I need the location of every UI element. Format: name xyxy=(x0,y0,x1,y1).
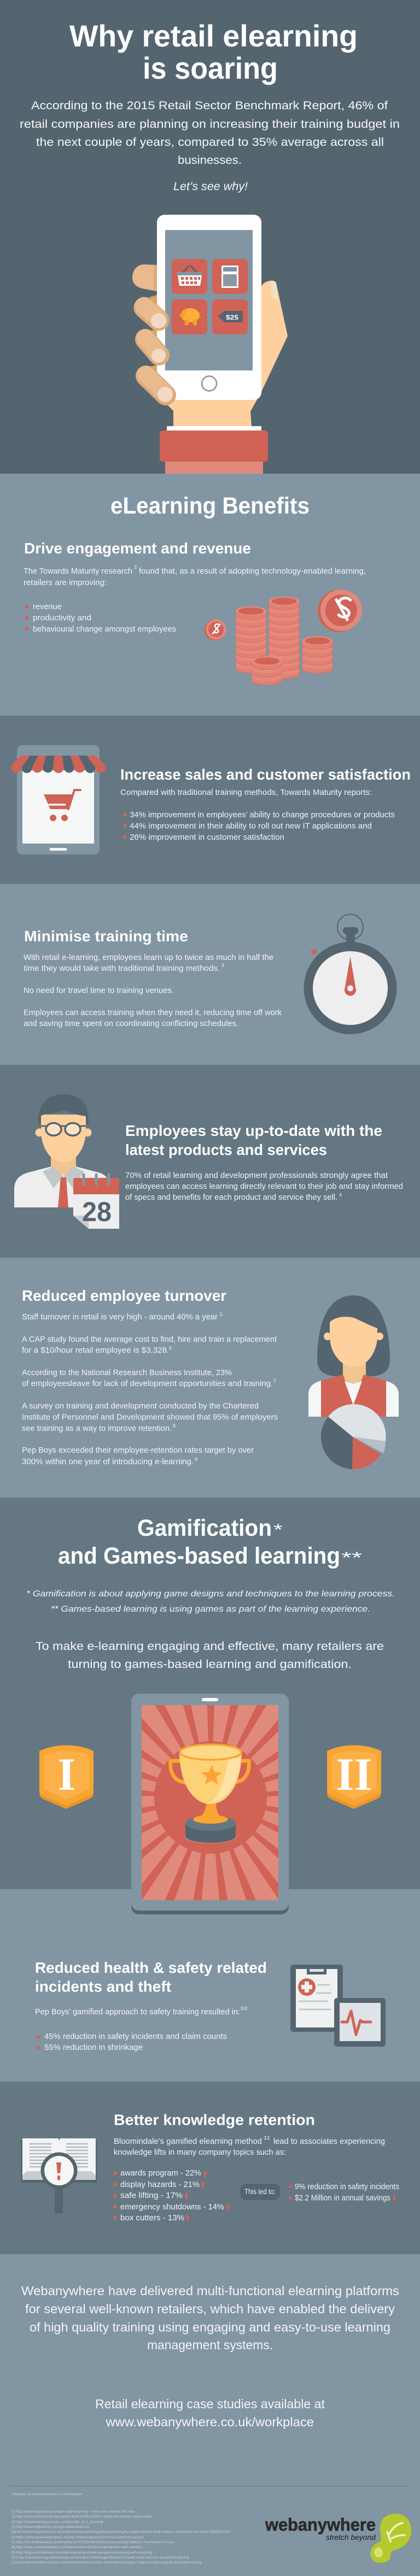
phone xyxy=(157,215,261,400)
bullet list: 45% reduction in safety incidents and claim counts xyxy=(44,2032,227,2041)
bullet list: results: 9% reduction in safety incidents xyxy=(295,2183,399,2191)
body text: lead to associates experiencing xyxy=(273,2137,385,2146)
bullet list: behavioural change amongst employees xyxy=(33,624,176,634)
heading: incidents and theft xyxy=(35,1978,171,1995)
heading xyxy=(35,1959,267,1995)
tagline: Let’s see why! xyxy=(173,180,248,193)
bullet list xyxy=(25,602,176,634)
closing text xyxy=(21,2284,399,2352)
app: piggy bank xyxy=(172,299,207,334)
body text: 4 xyxy=(339,1192,342,1198)
bullet list: revenue xyxy=(33,602,62,611)
body text: of employeesleave for lack of development opportunities and training. xyxy=(22,1380,273,1388)
bullet list: 55% reduction in shrinkage xyxy=(44,2043,143,2052)
calendar number: 28 xyxy=(82,1196,112,1227)
body text: Pep Boys’ gamified approach to safety training resulted in: xyxy=(35,2007,240,2017)
bullet list: 26% improvement in customer satisfaction xyxy=(130,833,284,842)
bullet list: topics: box cutters - 13% xyxy=(120,2213,184,2223)
body text: 2 xyxy=(134,564,137,570)
intro text: According to the 2015 Retail Sector Benchmark Report, 46% of xyxy=(31,99,388,112)
heading: Drive engagement and revenue xyxy=(24,540,251,557)
body text xyxy=(24,953,282,1028)
body text: Bloomindale’s gamified elearning method xyxy=(114,2137,262,2146)
body text: time they would take with traditional training methods. xyxy=(24,964,220,973)
app: basket xyxy=(172,259,207,294)
sleeve xyxy=(160,426,268,474)
heading: Employees stay up-to-date with the xyxy=(125,1122,382,1139)
body text: Employees can access training when they need it, reducing time off work xyxy=(24,1009,282,1017)
call to action text: Retail elearning case studies available at xyxy=(95,2397,325,2411)
icon: man with calendar xyxy=(14,1094,119,1229)
intro text: retail companies are planning on increasing their training budget in xyxy=(20,118,400,131)
body text: A survey on training and development conducted by the Chartered xyxy=(22,1402,259,1411)
body text: 6 xyxy=(169,1345,172,1351)
body text: With retail e-learning, employees learn up to twice as much in half the xyxy=(24,953,273,962)
body text: 7 xyxy=(273,1378,276,1384)
heading: Minimise training time xyxy=(24,928,188,945)
body text: knowledge lifts in many company topics such as: xyxy=(114,2148,286,2157)
heading: eLearning Benefits: eLearning Benefits xyxy=(110,493,310,519)
logo: webanywhere: webanywhere xyxy=(265,2515,376,2534)
intro text: businesses. xyxy=(178,154,242,167)
body text: Institute of Personnel and Development showed that 95% of employers xyxy=(22,1413,278,1422)
body text: No need for travel time to training venues. xyxy=(24,987,174,995)
references xyxy=(11,2510,231,2565)
body text: for a $10/hour retail employee is $3,328. xyxy=(22,1346,169,1355)
body text: Pep Boys exceeded their employee-retention rates target by over xyxy=(22,1446,254,1455)
references: [9] http://blog.commlabindia.com/elearning-design/retail-management-training-with-elearning xyxy=(11,2551,152,2555)
definitions text xyxy=(26,1589,395,1614)
icon: book and magnifier xyxy=(21,2138,97,2213)
body text: 8 xyxy=(173,1423,176,1429)
bullet list: topics: safe lifting - 17% xyxy=(120,2191,183,2200)
callout: this led to: This led to: xyxy=(244,2188,276,2196)
panel: drive engagement and revenue xyxy=(24,540,366,685)
credit: Infographic by www.webanywhere.co.uk/workplace xyxy=(11,2492,82,2496)
body text: 3 xyxy=(221,963,224,968)
bullet list: topics: display hazards - 21% xyxy=(120,2180,200,2189)
intro text: To make e-learning engaging and effective, many retailers are xyxy=(36,1640,384,1653)
references: [2] http://www.towardsmaturity.org/article/2015/06/11/2015-sector-benchmark-report-retail/ xyxy=(11,2515,151,2519)
badge: I: I xyxy=(57,1749,75,1800)
body text: 11 xyxy=(264,2135,270,2141)
closing text: management systems. xyxy=(147,2338,273,2352)
closing text: Webanywhere have delivered multi-functional elearning platforms xyxy=(21,2284,399,2298)
title xyxy=(69,19,358,85)
intro text: the next couple of years, compared to 35% average across all xyxy=(36,136,384,149)
app: calculator xyxy=(212,259,248,294)
icon: coins xyxy=(205,590,362,685)
bullet list: results xyxy=(289,2183,399,2203)
icon: tablet with trophy xyxy=(131,1694,289,1914)
body text: A CAP study found the average cost to find, hire and train a replacement xyxy=(22,1335,277,1344)
app: price tag xyxy=(212,299,248,334)
title: is soaring xyxy=(143,51,278,85)
logo: webanywhere xyxy=(265,2514,411,2563)
references: [3] http://retailertrainingservices.com/benefits_of_e_learning/ xyxy=(11,2520,103,2524)
icon: clipboard and heart monitor xyxy=(290,1965,386,2047)
body text: found that, as a result of adopting technology-enabled learning, xyxy=(139,567,366,576)
palm and thumb xyxy=(164,281,288,426)
panel: reduced employee turnover xyxy=(22,1287,399,1469)
bullet list: topics xyxy=(113,2168,230,2223)
bullet list xyxy=(36,2032,227,2052)
trophy xyxy=(171,1744,249,1843)
panel: reduced health and safety incidents xyxy=(35,1959,386,2052)
body text: 9 xyxy=(195,1457,197,1462)
body text: 300% within one year of introducing e-learning. xyxy=(22,1458,194,1466)
heading: gamification: and Games-based learning xyxy=(58,1543,340,1569)
body text xyxy=(24,564,366,587)
badge: II xyxy=(327,1745,381,1809)
app: price tag: $25 xyxy=(226,314,238,321)
references: [7] http://info.shifteleaning.com/blog/bid/247473/18-Mind-Blowing-eLearning-Statistics-You-Need-To-Know xyxy=(11,2540,174,2544)
bullet list: 34% improvement in employees’ ability to change procedures or products xyxy=(130,810,395,820)
icon: stopwatch xyxy=(304,915,397,1034)
body text: According to the National Research Business Institute, 23% xyxy=(22,1369,232,1377)
pie chart xyxy=(321,1404,386,1469)
body text: Staff turnover in retail is very high - around 40% a year xyxy=(22,1313,218,1322)
heading: gamification xyxy=(58,1515,363,1569)
badge: I xyxy=(39,1745,94,1809)
body text: see training as a way to improve retention. xyxy=(22,1424,172,1433)
intro text xyxy=(36,1640,384,1671)
bullet list: productivity and xyxy=(33,613,91,623)
heading: gamification: ** xyxy=(341,1549,363,1567)
heading: gamification: * xyxy=(273,1521,283,1539)
heading xyxy=(125,1122,382,1158)
body text: 10 xyxy=(240,2006,247,2011)
body text xyxy=(114,2135,385,2157)
star xyxy=(201,1765,222,1784)
closing text: for several well-known retailers, which have enabled the delivery xyxy=(25,2302,395,2316)
body text: employees can access learning directly relevant to their job and stay informed xyxy=(125,1182,403,1191)
references: [5]http://www.independent.co.uk/student/career-planning/getting-job/hanging-tough-how-the-retail-sector-is-weathering-the-storm-1669029.html xyxy=(11,2530,231,2534)
call to action text: www.webanywhere.co.uk/workplace xyxy=(105,2415,314,2429)
panel: better knowledge retention xyxy=(21,2111,399,2223)
body text: The Towards Maturity research xyxy=(24,567,132,576)
references: [1] http://elearningindustry.com/get-retail-elearning - some more relevant info here xyxy=(11,2510,135,2514)
intro text: Compared with traditional training methods, Towards Maturity reports: xyxy=(120,788,372,797)
references: [10] http://www.learningsolutionsmag.com/articles/1206/the-gamification-of-retail-safety-and-loss-prevention-training xyxy=(11,2556,189,2560)
panel: minimise training time xyxy=(24,915,397,1034)
definitions text: * Gamification is about applying game designs and techniques to the learning process. xyxy=(26,1589,395,1599)
bullet list: topics: emergency shutdowns - 14% xyxy=(120,2202,224,2212)
cart xyxy=(44,790,80,821)
body text xyxy=(22,1312,278,1466)
references: [6] https://www.americanprogress.org/wp-content/uploads/2012/11/CostofTurnover.pdf xyxy=(11,2536,143,2539)
intro text xyxy=(20,99,400,167)
references: [11] http://www.retailtouchpoints.com/features/retail-success-stories/bloomingdale-s-taps-axonify-to-gamify-associate-training xyxy=(11,2561,201,2565)
body text: and saving time spent on coordinating conflicting schedules. xyxy=(24,1019,238,1028)
fingers xyxy=(132,264,173,402)
references: [8] http://www.computerweekly.com/feature/How-effective-training-aids-staff-retention xyxy=(11,2545,142,2549)
heading: latest products and services xyxy=(125,1141,327,1158)
intro text: turning to games-based learning and gamification. xyxy=(68,1658,352,1671)
heading: Reduced health & safety related xyxy=(35,1959,267,1976)
bullet list: results: $2.2 Million in annual savings xyxy=(295,2194,390,2203)
body text: retailers are improving: xyxy=(24,578,107,587)
heading: Increase sales and customer satisfaction xyxy=(120,766,411,783)
thumb nail xyxy=(270,281,278,299)
heading: gamification: Gamification xyxy=(137,1515,272,1541)
title: Why retail elearning xyxy=(69,19,358,53)
heading: Better knowledge retention xyxy=(114,2111,315,2129)
closing text: of high quality training using engaging and easy-to-use learning xyxy=(30,2320,390,2334)
panel: employees stay up-to-date xyxy=(14,1094,403,1229)
body text: of specs and benefits for each product and service they sell. xyxy=(125,1193,337,1202)
definitions text: ** Games-based learning is using games as part of the learning experience. xyxy=(51,1605,370,1614)
bullet list xyxy=(122,810,395,842)
body text: 5 xyxy=(220,1312,223,1317)
panel: increase sales and customer satisfaction xyxy=(11,745,411,854)
references: [4] http://elearningindustry.com/get-retail-elearning xyxy=(11,2525,89,2529)
illustration: hand holding phone xyxy=(132,215,288,474)
heading: Reduced employee turnover xyxy=(22,1287,226,1304)
icon: tablet storefront xyxy=(11,745,106,854)
call to action text xyxy=(95,2397,325,2429)
badge: II: II xyxy=(336,1749,372,1800)
logo: webanywhere: stretch beyond xyxy=(326,2533,376,2542)
callout: this led to xyxy=(240,2184,280,2200)
bullet list: topics: awards program - 22% xyxy=(120,2168,201,2178)
bullet list: 44% improvement in their ability to roll out new IT applications and xyxy=(130,822,372,830)
icon: woman with pie chart xyxy=(308,1295,399,1469)
awning xyxy=(11,756,106,773)
body text xyxy=(125,1171,403,1202)
body text: 70% of retail learning and development professionals strongly agree that xyxy=(125,1171,388,1180)
